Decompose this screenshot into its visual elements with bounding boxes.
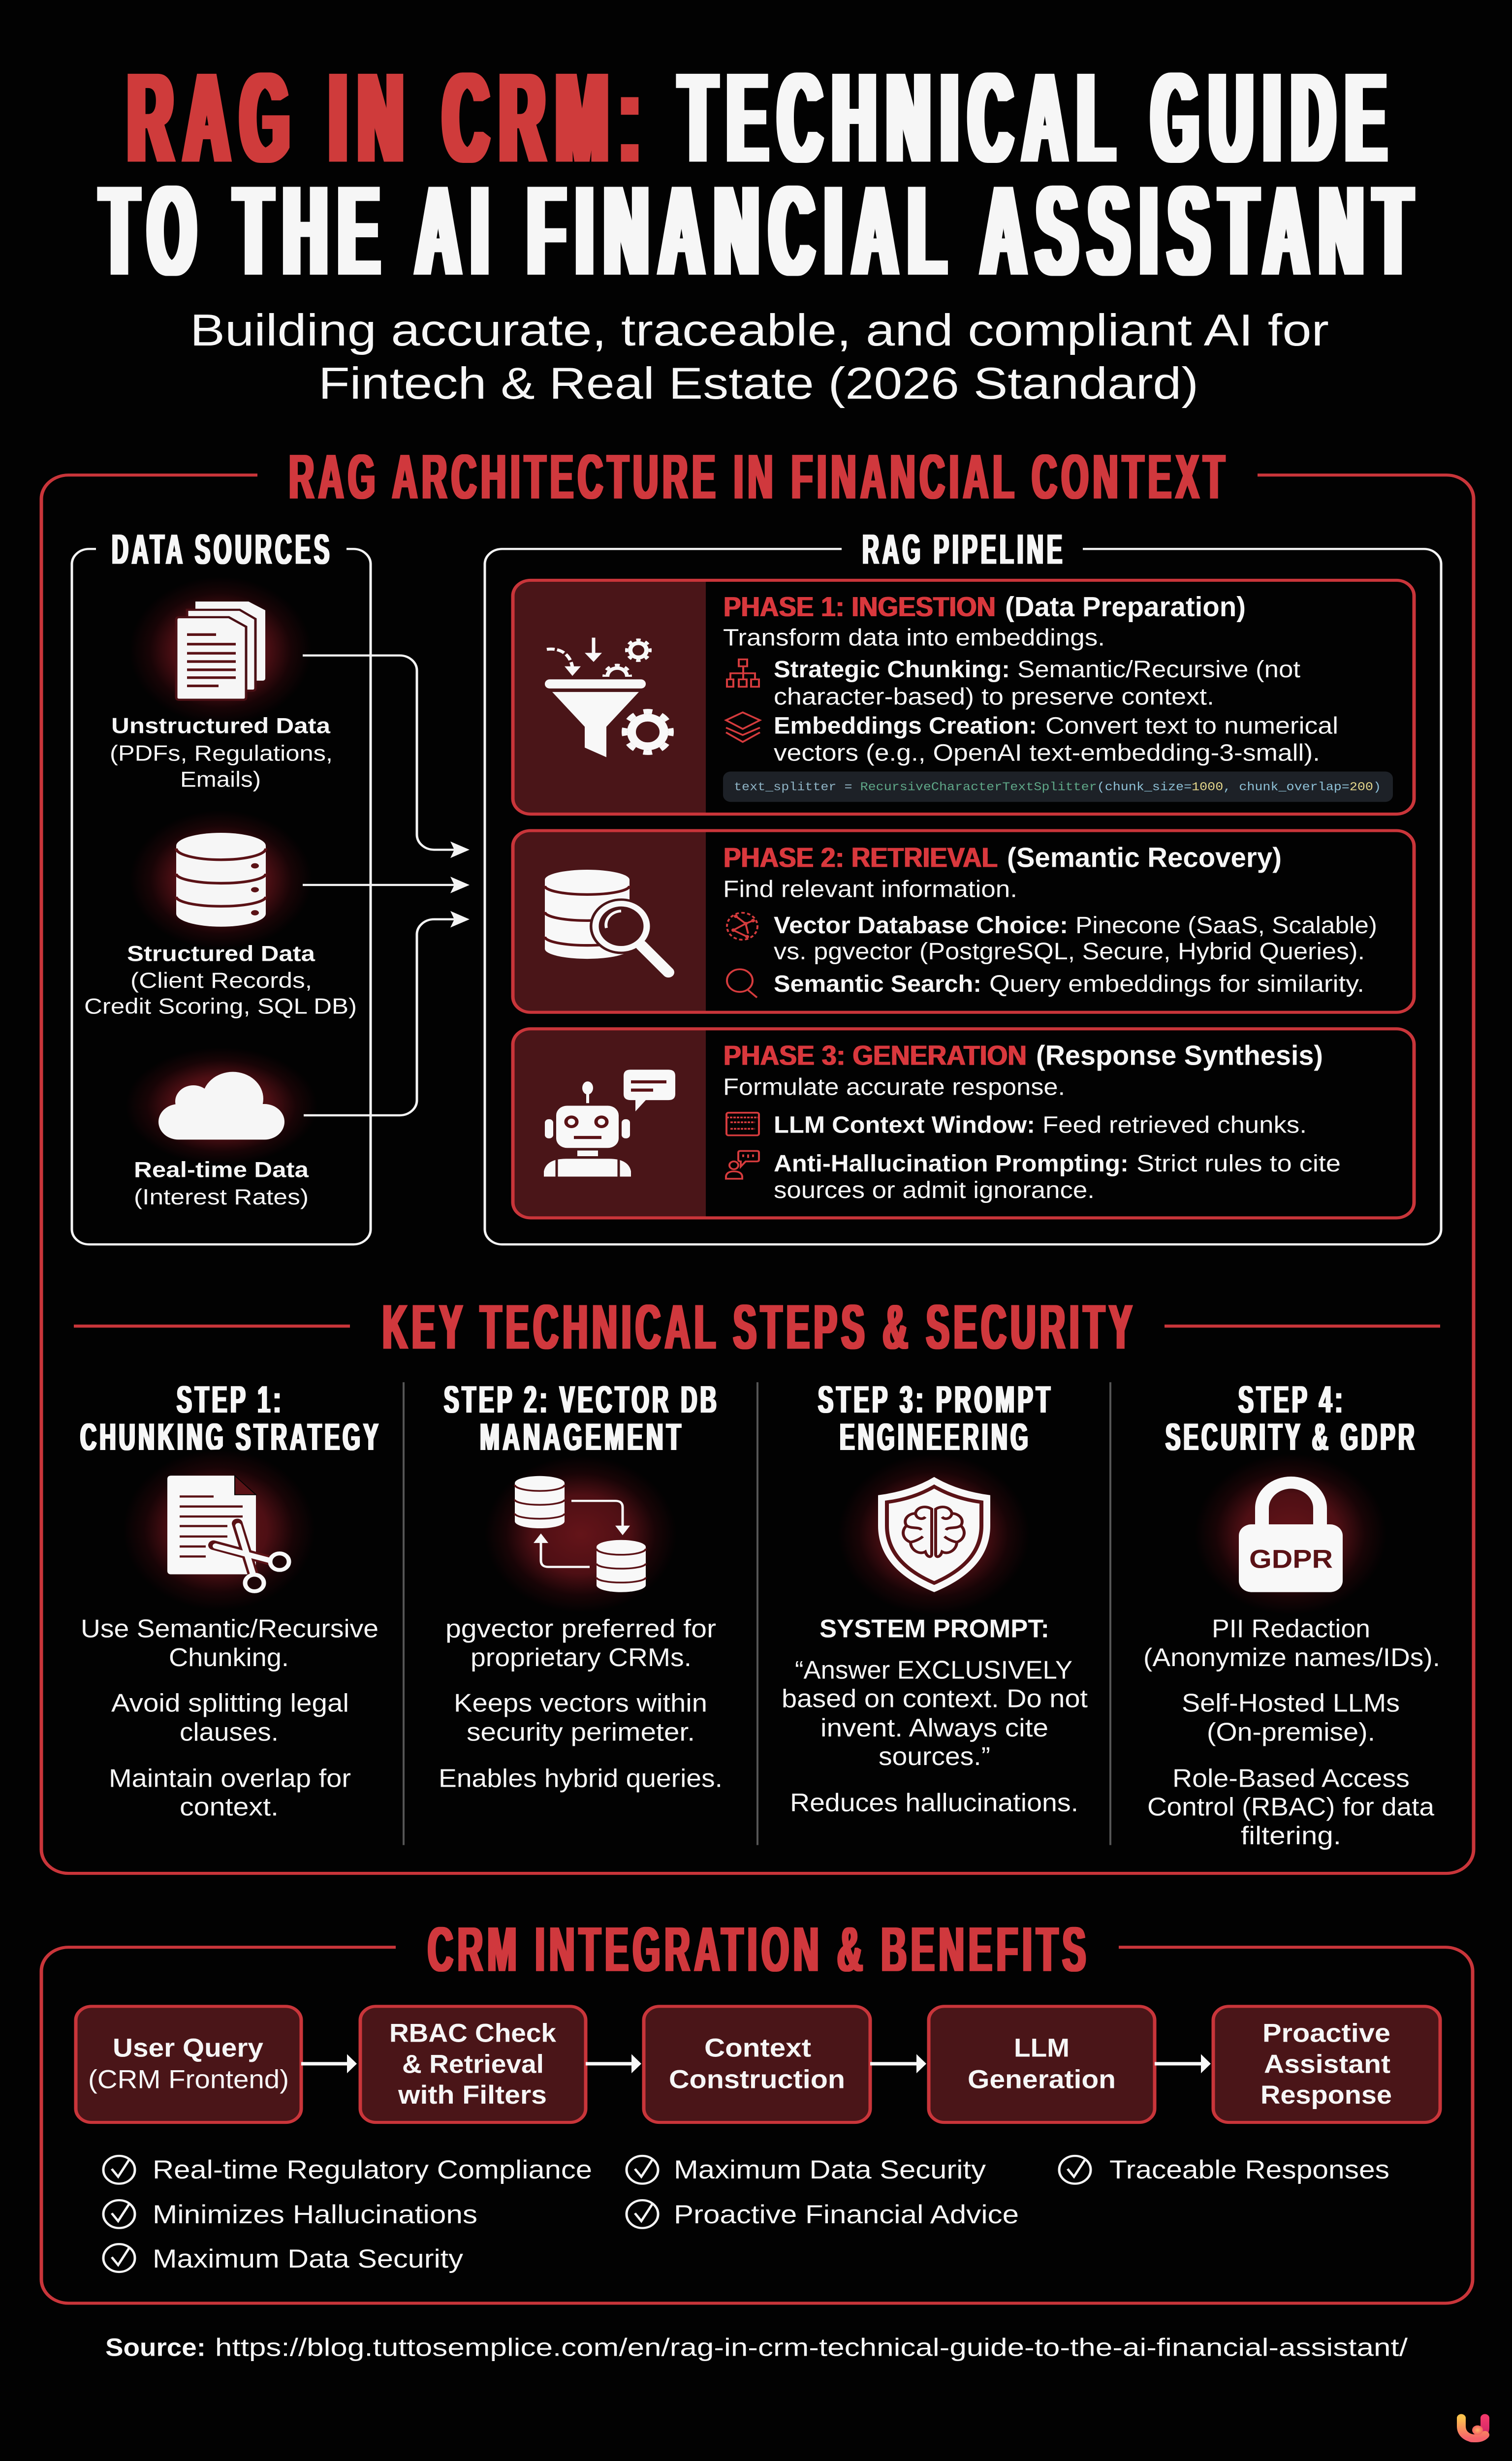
text: unstructured data: Unstructured Data (111, 714, 331, 738)
text: structured data: Credit Scoring, SQL DB) (84, 994, 357, 1018)
text: LLM context window: LLM Context Window: (774, 1111, 1035, 1138)
text: step 4 points: filtering. (1241, 1821, 1341, 1850)
text: vector database choice: Pinecone (SaaS, Scalable) (1075, 912, 1377, 938)
benefit: maximum data security repeat: Maximum Data Security (153, 2244, 464, 2273)
text: embeddings creation: Embeddings Creation: (774, 712, 1037, 739)
text: step 1 points: clauses. (180, 1718, 279, 1746)
text: strategic chunking: character-based) to preserve context. (774, 683, 1214, 710)
text: real-time data: Real-time Data (134, 1157, 309, 1182)
text: LLM context window (774, 1111, 1307, 1138)
text: step 3 system prompt: Reduces hallucinations. (790, 1788, 1078, 1817)
benefit: maximum data security: Maximum Data Security (674, 2155, 986, 2184)
source line: https://blog.tuttosemplice.com/en/rag-in-crm-technical-guide-to-the-ai-financial-assistant/ (215, 2333, 1408, 2362)
text: strategic chunking: Strategic Chunking: (774, 656, 1010, 682)
flow box: RBAC check and retrieval: with Filters (398, 2080, 547, 2109)
flow box: context construction: Context (704, 2033, 811, 2062)
text: step 1 points: Maintain overlap for (109, 1764, 351, 1793)
panel: phase 1 ingestion (513, 580, 1414, 814)
heading: step 3: ENGINEERING (840, 1416, 1031, 1458)
flow box: RBAC check and retrieval (360, 2006, 586, 2122)
flow box: proactive assistant response: Response (1260, 2080, 1392, 2109)
text: step 3 system prompt (782, 1614, 1088, 1817)
subtitle (190, 305, 1329, 408)
subtitle: Fintech & Real Estate (2026 Standard) (318, 358, 1198, 408)
arrow: context to generation (870, 2054, 926, 2073)
text: phase 1 summary: Transform data into embeddings. (723, 624, 1105, 651)
text: step 4 points: Role-Based Access (1172, 1764, 1410, 1793)
icon: database (130, 810, 312, 949)
icon: GDPR padlock: GDPR (1249, 1545, 1333, 1574)
text: semantic search: Semantic Search: (774, 970, 981, 997)
text: phase 3 summary: Formulate accurate response. (723, 1073, 1065, 1100)
heading: step 1: CHUNKING STRATEGY (80, 1416, 381, 1458)
icon: funnel with gears (545, 637, 671, 757)
title: RAG IN CRM: (128, 46, 652, 189)
heading: phase 2: (Semantic Recovery) (1007, 842, 1282, 873)
text: step 4 points: PII Redaction (1212, 1614, 1370, 1643)
panel: RAG architecture in financial context (41, 442, 1474, 1873)
text: anti-hallucination prompting: sources or admit ignorance. (774, 1176, 1095, 1203)
text: structured data (84, 941, 357, 1018)
text: step 3 system prompt: invent. Always cite (820, 1713, 1048, 1742)
text: anti-hallucination prompting (774, 1150, 1341, 1203)
text: phase 2 summary: Find relevant information. (723, 876, 1017, 902)
benefit: minimizes hallucinations: Minimizes Hallucinations (153, 2200, 477, 2229)
flow box: user query: User Query (113, 2033, 264, 2062)
text: step 3 system prompt: based on context. Do not (782, 1684, 1088, 1713)
panel frame: CRM integration (41, 1947, 1473, 2303)
icon: robot with chat bubble (544, 1070, 675, 1176)
text: step 1 points: context. (180, 1793, 279, 1821)
arrow: retrieval to context (586, 2054, 641, 2073)
column: step 2 vector db management (439, 1378, 723, 1793)
text: anti-hallucination prompting: Strict rules to cite (1136, 1150, 1341, 1176)
text: real-time data (134, 1157, 309, 1209)
text: step 4 points (1143, 1614, 1440, 1850)
text: step 2 points (439, 1614, 723, 1793)
text: strategic chunking: Semantic/Recursive (not (1017, 656, 1301, 682)
panel: RAG pipeline: RAG PIPELINE (862, 525, 1066, 573)
heading: phase 3: PHASE 3: GENERATION (724, 1040, 1027, 1071)
flow box: RBAC check and retrieval: & Retrieval (402, 2050, 544, 2079)
text: embeddings creation: vectors (e.g., OpenAI text-embedding-3-small). (774, 739, 1320, 766)
column: step 3 prompt engineering (782, 1378, 1088, 1817)
text: step 3 system prompt: “Answer EXCLUSIVELY (795, 1656, 1072, 1684)
panel: RAG pipeline (485, 525, 1441, 1244)
flow box: proactive assistant response (1213, 2006, 1440, 2122)
flow box: proactive assistant response: Assistant (1264, 2050, 1390, 2079)
panel: data sources (72, 525, 371, 1244)
flow box: RBAC check and retrieval: RBAC Check (389, 2019, 557, 2048)
panel frame: pipeline (485, 549, 1441, 1244)
flow box: user query: (CRM Frontend) (88, 2065, 289, 2094)
text: anti-hallucination prompting: Anti-Hallucination Prompting: (774, 1150, 1129, 1176)
heading: step 1 (80, 1378, 381, 1458)
flow box: context construction (644, 2006, 870, 2122)
text: semantic search: Query embeddings for similarity. (989, 970, 1364, 997)
code snippet (723, 771, 1393, 802)
icon: context window (726, 1113, 759, 1136)
text: step 1 points: Chunking. (169, 1643, 289, 1672)
heading: phase 1: (Data Preparation) (1005, 591, 1246, 622)
heading: phase 3 (724, 1040, 1323, 1071)
flow box: LLM generation (929, 2006, 1155, 2122)
panel: data sources: DATA SOURCES (112, 525, 333, 573)
column: step 1 chunking strategy (80, 1378, 381, 1821)
icon: documents (129, 577, 312, 725)
benefit: traceable responses: Traceable Responses (1109, 2155, 1389, 2184)
text: vector database choice: vs. pgvector (PostgreSQL, Secure, Hybrid Queries). (774, 938, 1365, 964)
heading: step 3 (818, 1378, 1053, 1458)
source line: Source: (105, 2333, 206, 2362)
arrow: query to retrieval (301, 2054, 357, 2073)
text: step 1 points: Use Semantic/Recursive (81, 1614, 378, 1643)
text: semantic search (774, 970, 1364, 997)
panel frame: architecture (41, 475, 1474, 1873)
text: unstructured data (110, 714, 333, 791)
subtitle: Building accurate, traceable, and compliant AI for (190, 305, 1329, 355)
benefit: proactive financial advice: Proactive Financial Advice (674, 2200, 1019, 2229)
section: key technical steps and security (74, 1292, 1440, 1850)
flow box: proactive assistant response: Proactive (1262, 2019, 1390, 2048)
heading: step 2: MANAGEMENT (480, 1416, 684, 1458)
icon: person with speech bubble (726, 1151, 759, 1179)
icon: document and scissors (123, 1450, 315, 1610)
benefits list (103, 2155, 1389, 2273)
text: step 3 system prompt: sources.” (879, 1742, 990, 1770)
icon: vector network (727, 913, 757, 940)
text: unstructured data: (PDFs, Regulations, (110, 741, 333, 765)
text: structured data: (Client Records, (130, 968, 312, 993)
heading: phase 1: PHASE 1: INGESTION (724, 591, 996, 622)
icon: hierarchy (727, 660, 759, 687)
arrows: data sources to pipeline (303, 656, 470, 1115)
panel frame: data sources (72, 549, 371, 1244)
icon: shield with brain (838, 1454, 1030, 1615)
heading: step 2 (444, 1378, 720, 1458)
text: step 1 points: Avoid splitting legal (111, 1689, 349, 1717)
heading: phase 2 (724, 842, 1282, 873)
text: step 4 points: Self-Hosted LLMs (1182, 1689, 1400, 1717)
text: real-time data: (Interest Rates) (134, 1185, 309, 1209)
heading: step 4 (1166, 1378, 1418, 1458)
icon: cloud (126, 1047, 317, 1165)
text: embeddings creation: Convert text to numerical (1045, 712, 1338, 739)
panel: phase 3 generation (513, 1029, 1414, 1218)
arrow: generation to response (1155, 2054, 1211, 2073)
benefit: real-time regulatory compliance: Real-time Regulatory Compliance (153, 2155, 592, 2184)
flow box: context construction: Construction (669, 2065, 845, 2094)
icon: database with magnifier (545, 870, 668, 972)
text: step 2 points: security perimeter. (467, 1718, 695, 1746)
flow box: user query (76, 2006, 301, 2122)
heading: phase 3: (Response Synthesis) (1036, 1040, 1323, 1071)
text: step 3 system prompt: SYSTEM PROMPT: (819, 1614, 1049, 1643)
icon: search (727, 969, 757, 998)
text: unstructured data: Emails) (180, 767, 261, 791)
text: strategic chunking (774, 656, 1301, 710)
text: embeddings creation (774, 712, 1338, 766)
text: step 4 points: (On-premise). (1207, 1718, 1375, 1746)
text: step 2 points: pgvector preferred for (445, 1614, 716, 1643)
text: structured data: Structured Data (127, 941, 315, 966)
heading: phase 1 (724, 591, 1246, 622)
icon: layers (726, 712, 760, 742)
heading: step 1: STEP 1: (177, 1378, 284, 1421)
heading: step 3: STEP 3: PROMPT (818, 1378, 1053, 1421)
text: step 2 points: proprietary CRMs. (471, 1643, 692, 1672)
icon: GDPR padlock (1195, 1454, 1386, 1615)
title (101, 46, 1423, 302)
text: vector database choice (774, 912, 1377, 964)
heading: step 4: STEP 4: (1238, 1378, 1346, 1421)
heading: phase 2: PHASE 2: RETRIEVAL (724, 842, 998, 873)
panel: CRM integration and benefits (41, 1914, 1473, 2303)
text: step 4 points: (Anonymize names/IDs). (1143, 1643, 1440, 1672)
column: step 4 security and GDPR (1143, 1378, 1440, 1850)
text: vector database choice: Vector Database Choice: (774, 912, 1068, 938)
text: step 1 points (81, 1614, 378, 1821)
text: step 2 points: Keeps vectors within (454, 1689, 707, 1717)
logo (1461, 2418, 1485, 2438)
icon: database sync (485, 1456, 677, 1612)
text: step 2 points: Enables hybrid queries. (439, 1764, 723, 1793)
heading: step 2: STEP 2: VECTOR DB (444, 1378, 720, 1421)
panel: phase 2 retrieval (513, 831, 1414, 1012)
code snippet: text_splitter = RecursiveCharacterTextSplitter(chunk_size=1000, chunk_overlap=200) (734, 781, 1381, 794)
flow box: LLM generation: LLM (1014, 2033, 1070, 2062)
text: step 4 points: Control (RBAC) for data (1147, 1793, 1434, 1821)
flow box: LLM generation: Generation (968, 2065, 1116, 2094)
text: LLM context window: Feed retrieved chunks. (1042, 1111, 1307, 1138)
